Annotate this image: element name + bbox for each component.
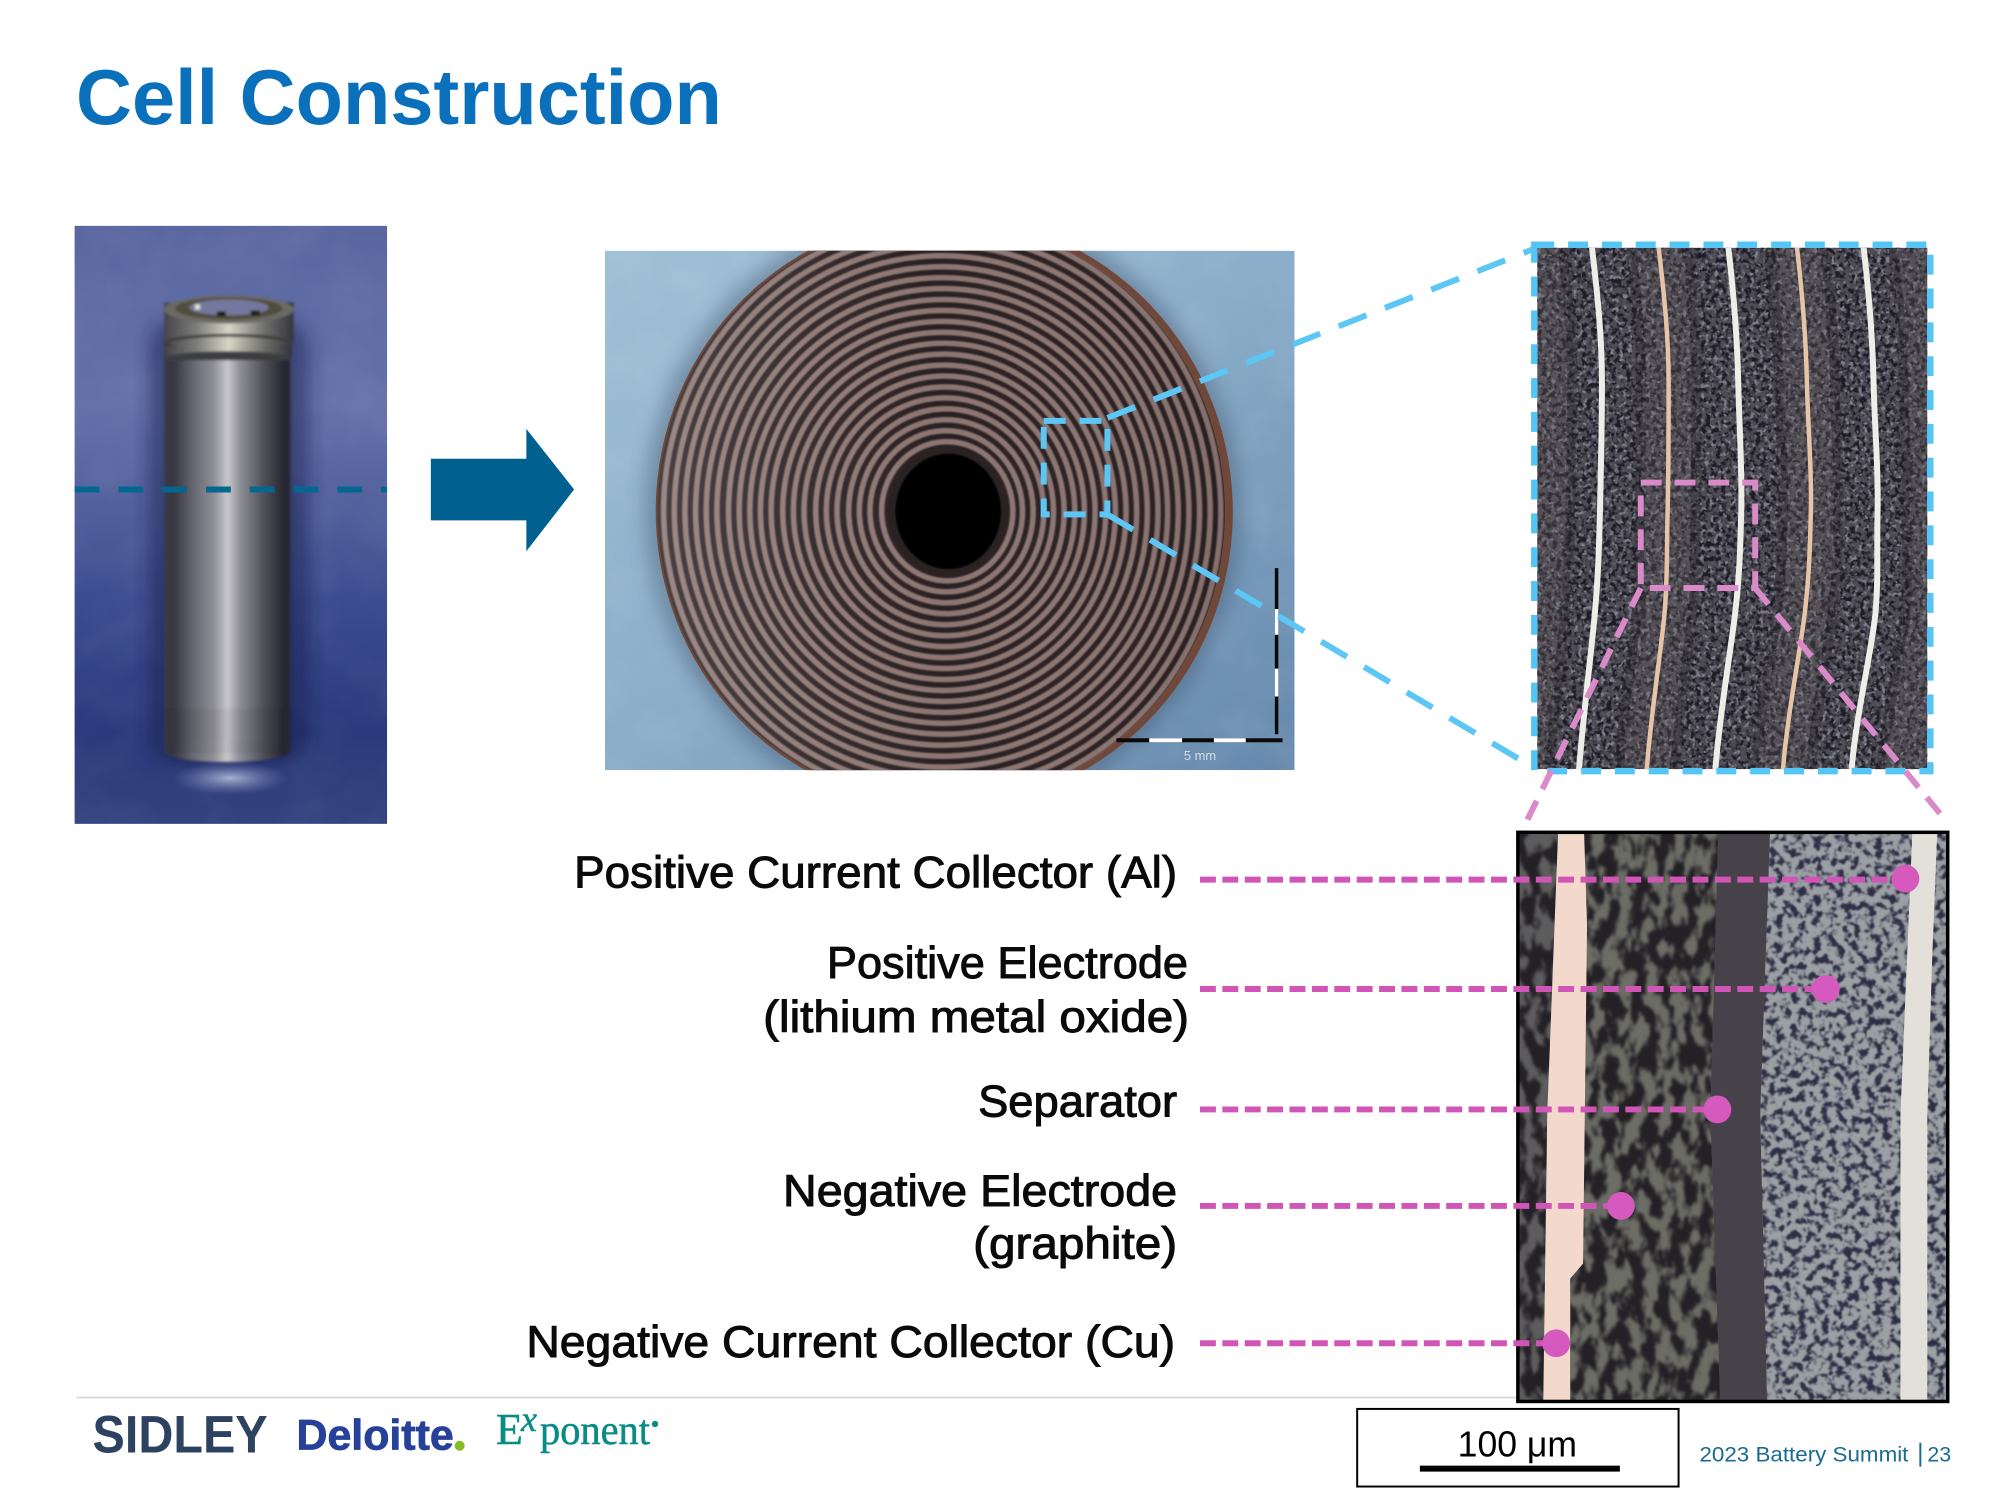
logo: Deloitte: Deloitte — [297, 1412, 454, 1460]
dashed frame around medium zoom micrograph — [1534, 245, 1930, 771]
negative electrode — [1570, 831, 1721, 1403]
scale bar box — [1357, 1409, 1679, 1487]
aluminum current collector — [1900, 831, 1937, 1403]
callout: separator: Separator — [978, 1076, 1177, 1126]
callout: separator — [978, 1076, 1731, 1126]
callout: positive electrode — [763, 938, 1840, 1042]
copper current collector — [1543, 831, 1587, 1403]
logo: Exponent: ponent — [540, 1408, 650, 1454]
footer text: 2023 Battery Summit — [1699, 1443, 1908, 1467]
photo: cylindrical battery cell — [75, 226, 387, 824]
micrograph: electrode layers, high zoom — [1516, 831, 1949, 1403]
callout: negative electrode — [783, 1166, 1635, 1269]
callout: positive current collector — [574, 848, 1919, 898]
logo: Sidley: SIDLEY — [93, 1406, 268, 1465]
title: Cell Construction — [76, 55, 722, 141]
footer text: 23 — [1927, 1443, 1951, 1467]
zoom box on jelly roll — [1044, 421, 1107, 514]
callout: negative current collector: Negative Current Collector (Cu) — [526, 1317, 1175, 1367]
callout: positive current collector: Positive Current Collector (Al) — [574, 848, 1177, 898]
callout: positive electrode: (lithium metal oxide) — [763, 992, 1189, 1042]
callout: negative electrode: Negative Electrode — [783, 1166, 1177, 1216]
callout: negative electrode: (graphite) — [973, 1219, 1177, 1269]
logo: Exponent — [496, 1399, 658, 1454]
zoom box on micrograph with leader lines — [1527, 483, 1945, 820]
footer rule — [77, 1396, 1516, 1398]
logo: Exponent: E — [496, 1405, 523, 1454]
logo: Exponent: x — [520, 1399, 537, 1439]
section line across cell — [75, 487, 387, 493]
photo: cell cross-section jelly roll — [605, 250, 1294, 770]
callout: negative current collector — [526, 1317, 1570, 1367]
scale bar box: 100 μm — [1458, 1425, 1577, 1465]
positive electrode — [1760, 831, 1949, 1403]
leader lines to medium zoom — [1107, 249, 1534, 768]
photo: cell cross-section jelly roll: 5 mm — [1184, 748, 1216, 763]
separator — [1710, 831, 1770, 1403]
micrograph: electrode layers, medium zoom — [1522, 248, 1934, 769]
callout: positive electrode: Positive Electrode — [827, 938, 1188, 988]
arrow — [431, 429, 574, 551]
